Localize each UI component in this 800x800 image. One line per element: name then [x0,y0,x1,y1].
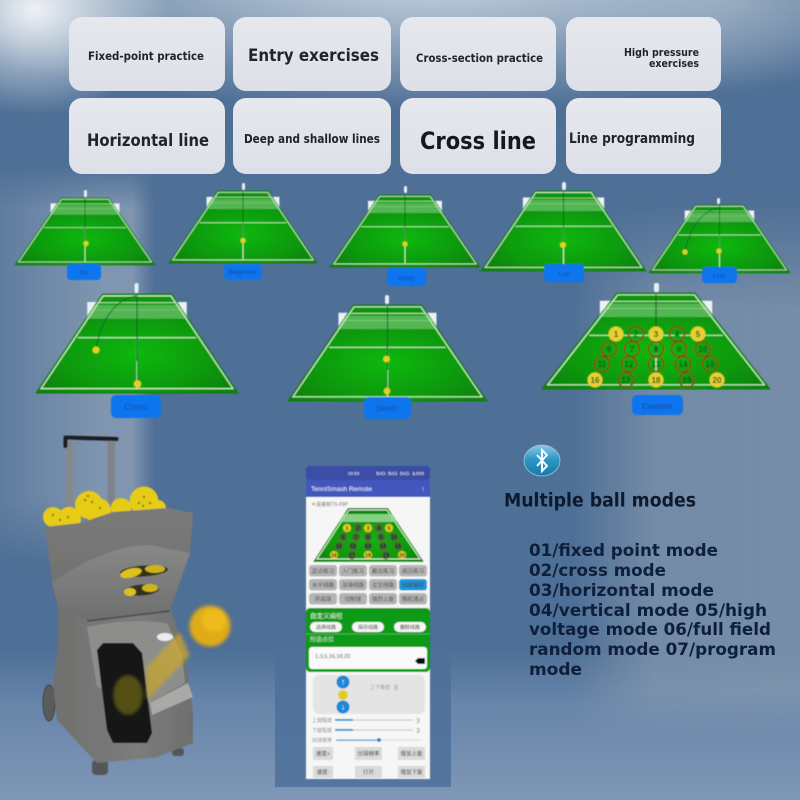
court: Custom: 14 [679,360,688,369]
app court: 4 [377,526,381,532]
app mode buttons [309,565,427,604]
app court: 1 [345,526,349,532]
icon: bluetooth [524,445,560,476]
motion control panel: ↓ [341,702,345,712]
app mode buttons: 强烈上旋 [372,595,394,603]
motion control panel: 上下橡度 [370,684,390,691]
card: cross line: Cross line [420,127,536,155]
app mode buttons: 深海线路 [342,581,364,589]
background light band right [590,224,800,720]
motion control panel: 5 [394,683,398,692]
status bar [306,466,430,480]
ball outlet [97,643,152,743]
card: cross-section practice: Cross-section practice [416,51,543,65]
app bar: ⁝ [422,487,424,493]
court: Custom: 20 [713,376,722,385]
card: deep and shallow lines: Deep and shallow lines [244,132,380,146]
bottom buttons: 速度+ [316,750,330,758]
sliders [312,717,421,744]
sliders: 上旋程度 [312,717,332,724]
court: Cross: Cross [124,402,148,412]
app court: 12 [350,544,356,550]
court: Custom: 10 [699,345,708,354]
court: Lob: Lob [559,271,570,278]
card: horizontal line [69,98,225,174]
mode list: voltage mode 06/full field [529,620,771,640]
card: cross line [400,98,556,174]
custom programming panel: 删除线路 [400,624,420,631]
app mode buttons: 水平线路 [312,581,334,589]
app bar [306,480,430,497]
app court: 6 [341,535,345,541]
court: Custom: 16 [591,376,600,385]
machine hopper [45,508,193,620]
app court: 15 [395,544,401,550]
court: Custom: 7 [630,345,635,354]
court: Fix: Fix [80,270,89,277]
court: Custom: 13 [652,360,661,369]
body highlight band [150,683,193,715]
app mode buttons: 定点练习 [312,567,334,575]
court: Lob [481,182,646,282]
mode list: random mode 07/program [529,640,776,660]
card: high pressure exercises: High pressure [624,46,699,59]
court: Custom: 18 [652,376,661,385]
sliders: 3 [416,728,420,735]
app court [313,508,424,562]
app mode buttons: 随机涌点 [402,595,424,603]
machine body [53,606,193,763]
machine wheel [43,685,55,721]
ball machine [43,438,230,775]
court: Beginner [169,183,317,280]
app mode buttons: 截击练习 [372,567,394,575]
motion control panel [313,675,425,714]
court: Custom: 19 [683,376,692,385]
bottom buttons: 增加上旋 [400,750,423,758]
court: Custom: 9 [677,345,682,354]
app court: 20 [399,553,405,559]
app court: 16 [331,553,337,559]
app mode buttons: 入门练习 [342,567,364,575]
status bar: 5G 5G 5G 100 [376,471,425,476]
machine handle [66,438,116,512]
app court: 14 [380,544,387,550]
court: Custom: 3 [654,330,659,339]
mode list: 03/horizontal mode [529,581,714,601]
court: Line: Line [713,273,726,280]
card: high pressure exercises [566,17,721,91]
phone screen [306,466,430,779]
card: horizontal line: Horizontal line [87,131,209,151]
court: Custom: 5 [696,330,701,339]
flying ball [190,606,230,646]
status bar: 09:59 [348,471,360,476]
app court: 11 [336,544,342,550]
motion control panel: ↑ [341,678,345,686]
machine badge [157,633,173,641]
connection status: 连接到TS-09P [316,501,349,508]
custom programming panel [306,608,430,672]
court: Custom: 6 [607,345,612,354]
body front panel [87,621,185,703]
custom programming panel: 自定义编程 [310,611,343,620]
machine feet [92,748,184,775]
court: Depth: Depth [376,404,398,413]
court: Beginner: Beginner [229,269,258,276]
court: Depth [288,295,487,419]
ball trail [146,632,190,700]
bottom buttons: 速度- [317,768,330,776]
card: cross-section practice [400,17,556,91]
court: Custom: 4 [675,330,680,339]
app bar: TenniSmash Remote [311,486,372,493]
card: entry exercises [233,17,391,91]
app court: 5 [387,526,391,532]
court: Custom: 1 [614,330,619,339]
court: Custom: 11 [598,360,607,369]
court: Volley [330,186,480,286]
card: entry exercises: Entry exercises [248,46,379,66]
background light band left [0,174,151,547]
card: line programming: Line programming [569,131,695,147]
app court: 8 [366,535,370,541]
app court: 3 [366,526,370,532]
custom programming panel: 保存线路 [358,624,378,631]
custom programming panel: 选择线路 [316,624,336,631]
card: deep and shallow lines [233,98,391,174]
sliders: 出球频率 [312,737,332,744]
hopper seam [87,611,170,621]
sliders: 下旋程度 [312,727,332,734]
phone app screenshot [306,466,430,779]
bottom buttons [313,747,425,778]
app mode buttons: 并高球 [315,595,332,603]
machine balls [43,486,166,531]
app court: 10 [391,535,397,541]
court: Line [649,198,790,283]
app court: 17 [349,553,355,559]
custom programming panel: 1,3,5,16,18,20 [315,654,350,660]
court: Cross [36,283,238,418]
court: Custom: 15 [706,360,715,369]
app court: 2 [356,526,360,532]
app court: 19 [383,553,389,559]
card: high pressure exercises: exercises [649,57,699,70]
app court: 13 [365,544,371,550]
app mode buttons: 高压练习 [402,567,424,575]
mode list: 01/fixed point mode [529,541,718,561]
mode list: 02/cross mode [529,561,666,581]
mode list: 04/vertical mode 05/high [529,601,767,621]
hopper shoulder [52,545,190,620]
mode list: mode [529,660,582,680]
card: fixed-point practice [69,17,225,91]
custom programming panel: 所选点位 [310,636,334,644]
bottom buttons: 增加下旋 [400,768,423,776]
heading: multiple ball modes: Multiple ball modes [504,490,696,512]
bottom buttons: 打开 [363,768,374,776]
court: Custom [542,283,770,415]
sliders: 3 [416,718,420,725]
app court: 9 [379,535,383,541]
app mode buttons: 交叉线路 [372,581,394,589]
bottom buttons: 出球频率 [357,750,380,758]
hopper slots [119,564,168,597]
card: line programming [566,98,721,174]
court: Volley: Volley [397,275,415,282]
court: Custom: Custom [642,402,672,411]
court: Custom: 17 [622,376,631,385]
mode cards [69,17,721,174]
app court: 7 [354,535,358,541]
court: Custom: 2 [634,330,639,339]
phone backdrop [275,655,451,787]
app mode buttons: 切削球 [345,595,362,603]
app court: 18 [365,553,371,559]
mode list [529,541,776,680]
card: fixed-point practice: Fixed-point practice [88,49,204,63]
court: Fix [15,190,155,280]
app mode buttons: 线路编程 [402,581,424,589]
court: Custom: 8 [654,345,659,354]
court: Custom: 12 [625,360,634,369]
